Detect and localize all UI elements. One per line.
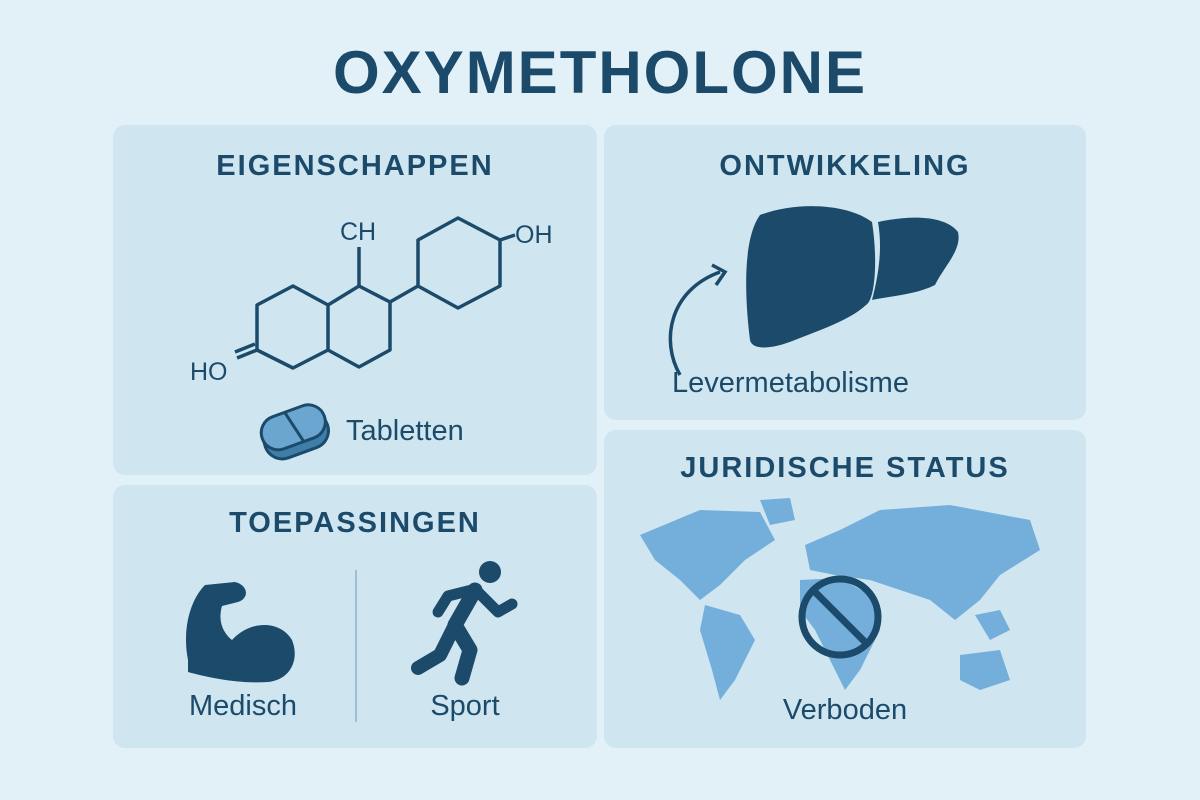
arrow: [670, 272, 720, 375]
panel: juridische status: [604, 430, 1086, 748]
text: verboden: Verboden: [783, 694, 907, 726]
world map: [640, 498, 1040, 700]
text: medisch: Medisch: [189, 690, 297, 722]
panel: eigenschappen: [113, 125, 597, 475]
panel: toepassingen: [113, 485, 597, 748]
heading: toepassingen: TOEPASSINGEN: [229, 507, 481, 539]
icon: ban symbol: [802, 579, 878, 655]
title: OXYMETHOLONE: [333, 39, 867, 106]
icon: muscle arm: [186, 582, 295, 682]
molecule: HO: [190, 358, 228, 386]
text: levermetabolisme: Levermetabolisme: [672, 367, 909, 399]
molecule: [190, 216, 552, 460]
icon: runner: [418, 561, 512, 678]
text: tabletten: Tabletten: [346, 415, 464, 447]
molecule: CH: [340, 218, 376, 246]
icon: liver: [746, 206, 959, 348]
text: sport: Sport: [430, 690, 500, 722]
molecule: OH: [515, 221, 552, 249]
icon: pill: [256, 400, 334, 464]
heading: eigenschappen: EIGENSCHAPPEN: [216, 150, 494, 182]
panel: ontwikkeling: [604, 125, 1086, 420]
heading: ontwikkeling: ONTWIKKELING: [719, 150, 971, 182]
heading: juridische status: JURIDISCHE STATUS: [680, 452, 1010, 484]
